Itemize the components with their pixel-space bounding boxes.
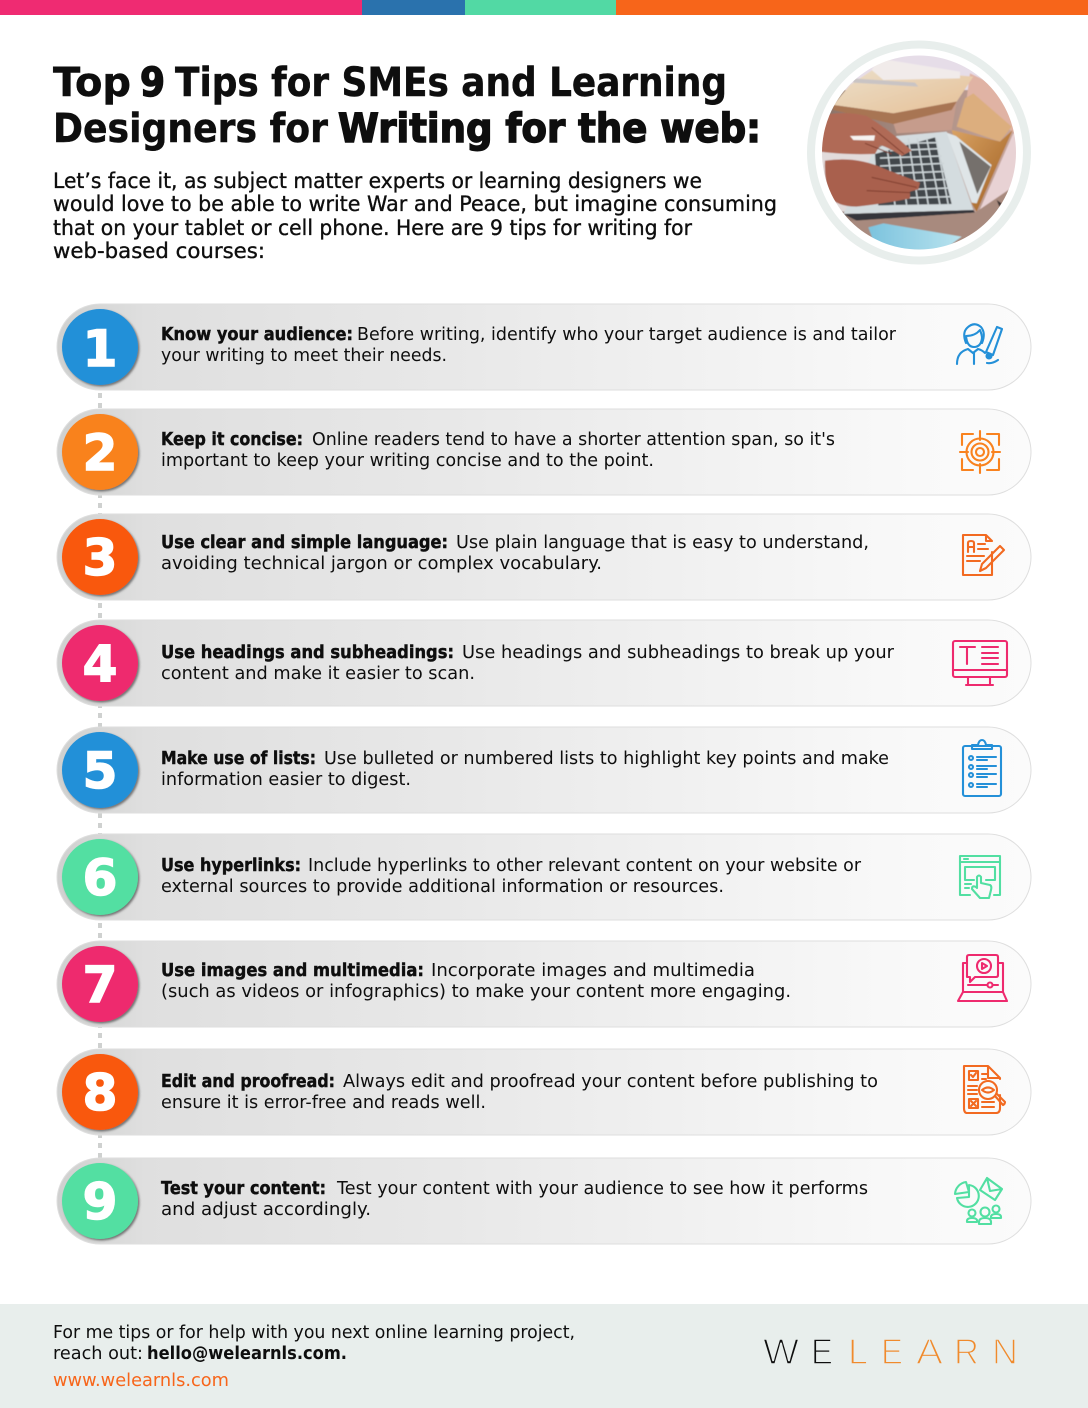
title: Top	[53, 60, 131, 106]
tip 8 panel	[57, 1049, 1031, 1135]
tip 4 text: Use headings and subheadings:	[161, 642, 454, 663]
tip 4 panel	[57, 620, 1031, 706]
tip 1 number badge	[62, 309, 138, 385]
tip 7 text	[161, 960, 791, 1002]
tip 6 text: Use hyperlinks:	[161, 855, 301, 876]
icon: browser window with pointing hand	[960, 856, 1000, 898]
tip 2 number badge	[62, 414, 138, 490]
tip 3 text: avoiding technical jargon or complex vocabulary.	[161, 553, 602, 574]
tip 6 panel	[57, 834, 1031, 920]
tip 1 panel	[57, 304, 1031, 390]
icon: laptop with video bubble	[958, 955, 1007, 1001]
tip 4 number badge: 4	[83, 635, 117, 693]
WELEARN logo	[763, 1331, 1018, 1372]
tip 7 text: Incorporate images and multimedia	[431, 960, 755, 981]
intro text: would love to be able to write War and Peace, but imagine consuming	[53, 192, 777, 216]
tip 9 text: Test your content with your audience to see how it performs	[336, 1178, 868, 1199]
tip 5 number badge: 5	[83, 742, 117, 800]
WELEARN logo: E	[811, 1331, 833, 1372]
tip 2 text: Keep it concise:	[161, 429, 303, 450]
tip 5 panel	[57, 727, 1031, 813]
WELEARN logo: L	[848, 1331, 868, 1372]
tip 9 number badge: 9	[83, 1173, 117, 1231]
tip 2 panel	[57, 409, 1031, 495]
tip 5 text	[161, 748, 889, 790]
title: Tips for SMEs and Learning	[175, 60, 727, 106]
icon: document and magnifier	[964, 1066, 1005, 1113]
icon: person with pen	[957, 324, 1002, 364]
tip 3 text: Use plain language that is easy to understand,	[456, 532, 869, 553]
tip 5 number badge	[62, 732, 138, 808]
title	[53, 60, 761, 152]
WELEARN logo: A	[916, 1331, 943, 1372]
WELEARN logo: R	[954, 1331, 979, 1372]
tip 6 number badge: 6	[83, 849, 117, 907]
tip 7 number badge: 7	[83, 956, 117, 1014]
tip 6 text: Include hyperlinks to other relevant content on your website or	[308, 855, 862, 876]
icon: document and pencil	[963, 535, 1004, 575]
tip 3 number badge	[62, 519, 138, 595]
tip 6 text	[161, 855, 862, 897]
tip 4 number badge	[62, 625, 138, 701]
photo: hands typing on a laptop	[811, 44, 1027, 260]
footer band	[0, 1304, 1088, 1408]
tip 9 text	[161, 1178, 868, 1220]
tip 5 text: Make use of lists:	[161, 748, 316, 769]
footer contact text	[53, 1322, 575, 1391]
tip 8 text: ensure it is error-free and reads well.	[161, 1092, 486, 1113]
tip 5 text: Use bulleted or numbered lists to highlight key points and make	[324, 748, 889, 769]
tip 1 text	[161, 324, 897, 366]
tip 1 text: Know your audience:	[161, 324, 353, 345]
tip 8 number badge: 8	[83, 1064, 117, 1122]
tip 1 text: your writing to meet their needs.	[161, 345, 447, 366]
footer contact text: www.welearnls.com	[53, 1370, 229, 1391]
tip 4 text: Use headings and subheadings to break up your	[462, 642, 895, 663]
tip 2 text: Online readers tend to have a shorter attention span, so it's	[312, 429, 835, 450]
tip 4 text: content and make it easier to scan.	[161, 663, 475, 684]
intro text: Let’s face it, as subject matter experts or learning designers we	[53, 169, 702, 193]
tip 2 text: important to keep your writing concise and to the point.	[161, 450, 654, 471]
tip 8 number badge	[62, 1054, 138, 1130]
tip 4 text	[161, 642, 895, 684]
tip 1 number badge: 1	[83, 320, 117, 378]
tip 7 panel	[57, 941, 1031, 1027]
tip 6 text: external sources to provide additional information or resources.	[161, 876, 724, 897]
WELEARN logo: N	[992, 1331, 1018, 1372]
tip 9 text: and adjust accordingly.	[161, 1199, 371, 1220]
tip 3 text	[161, 532, 869, 574]
footer contact text: reach out:	[53, 1343, 143, 1364]
tip 6 number badge	[62, 839, 138, 915]
tip 3 text: Use clear and simple language:	[161, 532, 448, 553]
tip 9 number badge	[62, 1163, 138, 1239]
tip 3 panel	[57, 514, 1031, 600]
tip 8 text: Always edit and proofread your content before publishing to	[343, 1071, 878, 1092]
tip 2 text	[161, 429, 835, 471]
title: 9	[140, 60, 165, 106]
tip 7 text: (such as videos or infographics) to make your content more engaging.	[161, 981, 791, 1002]
tip 9 panel	[57, 1158, 1031, 1244]
top colour bar	[0, 0, 1088, 15]
footer contact text: For me tips or for help with you next online learning project,	[53, 1322, 575, 1343]
tip 2 number badge: 2	[83, 424, 117, 482]
icon: pie chart, envelope and people	[955, 1178, 1002, 1224]
intro text: that on your tablet or cell phone. Here are 9 tips for writing for	[53, 216, 692, 240]
tip 5 text: information easier to digest.	[161, 769, 411, 790]
tip 3 number badge: 3	[83, 529, 117, 587]
intro text	[53, 169, 777, 263]
connector: dotted line between number circles	[98, 393, 102, 1158]
WELEARN logo: W	[763, 1331, 799, 1372]
title: Writing for the web:	[338, 106, 761, 152]
tip 1 text: Before writing, identify who your target audience is and tailor	[357, 324, 897, 345]
title: Designers for	[53, 106, 328, 152]
tip 7 text: Use images and multimedia:	[161, 960, 424, 981]
icon: target	[960, 431, 1000, 473]
footer contact text: hello@welearnls.com.	[147, 1343, 347, 1364]
intro text: web-based courses:	[53, 239, 265, 263]
icon: monitor with text	[953, 641, 1007, 685]
tip 8 text	[161, 1071, 878, 1113]
WELEARN logo: E	[881, 1331, 903, 1372]
icon: clipboard checklist	[963, 740, 1001, 796]
tip 9 text: Test your content:	[161, 1178, 326, 1199]
tip 8 text: Edit and proofread:	[161, 1071, 335, 1092]
tip 7 number badge	[62, 946, 138, 1022]
